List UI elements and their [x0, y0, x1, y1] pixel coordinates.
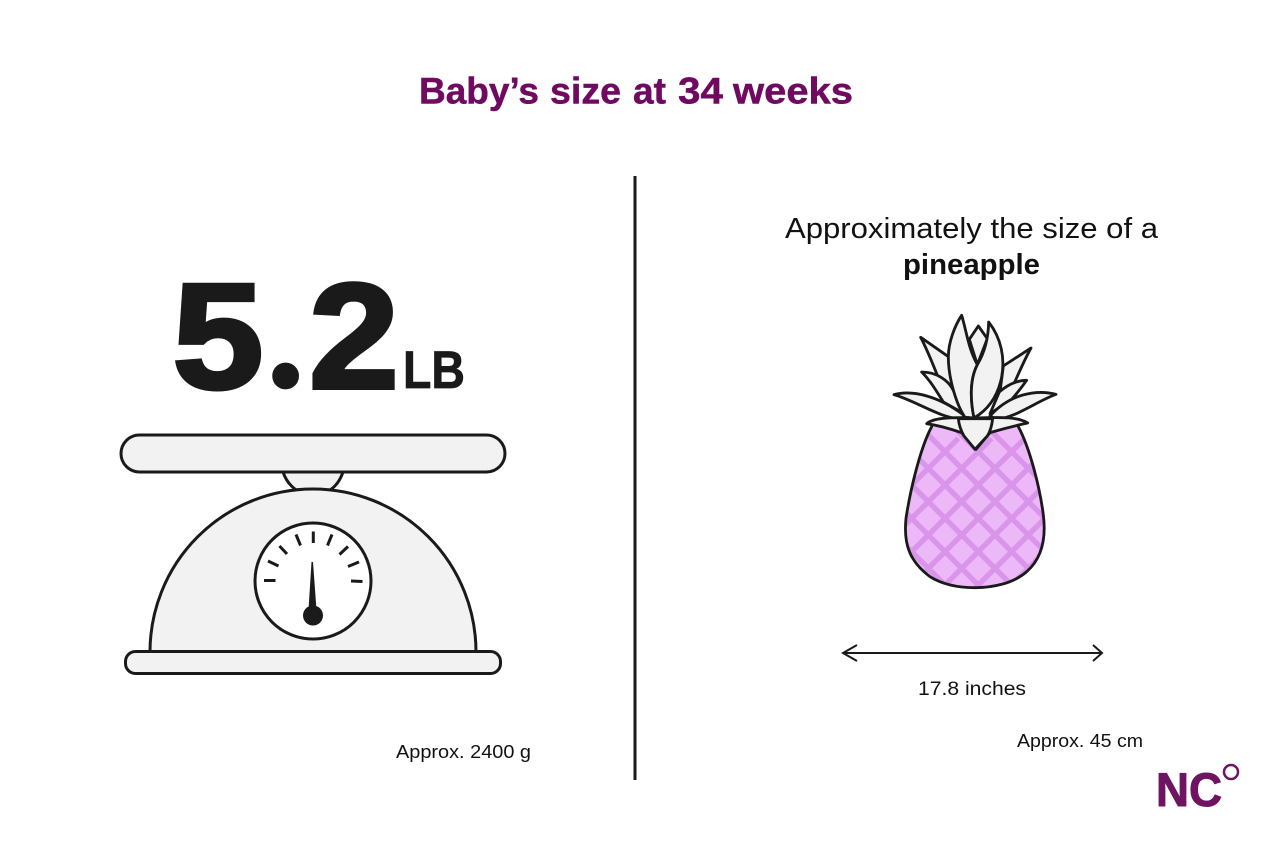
title: at [633, 70, 667, 112]
icon: kitchen scale [121, 435, 505, 674]
weight value: LB [403, 341, 465, 400]
comparison heading: Approximately the size of a [785, 213, 1159, 245]
scale platform [121, 435, 505, 472]
logo ring [1224, 765, 1238, 779]
title: weeks [732, 70, 853, 112]
pineapple leaves [894, 315, 1056, 449]
pineapple body [904, 426, 1046, 590]
metric weight note: Approx. 2400 g [396, 741, 531, 762]
weight value: . [265, 240, 306, 423]
logo letters: NC [1156, 763, 1222, 816]
infographic canvas [120, 76, 1240, 807]
weight value [172, 240, 465, 423]
scale dome [150, 489, 476, 652]
length in inches: 17.8 inches [918, 678, 1026, 700]
divider [634, 176, 636, 780]
title: 34 [678, 70, 723, 112]
panel: weight [121, 240, 531, 762]
scale base [126, 652, 500, 674]
comparison fruit name: pineapple [903, 249, 1040, 281]
width arrow [843, 645, 1102, 661]
icon: pineapple [892, 314, 1058, 590]
logo [1156, 763, 1238, 816]
panel: size comparison [785, 213, 1159, 751]
scale dial [255, 523, 371, 639]
title: size [550, 70, 621, 112]
weight value: 2 [309, 252, 399, 420]
weight value: 5 [172, 252, 264, 420]
title: Baby’s [419, 70, 539, 112]
title [419, 70, 853, 112]
scale stem [283, 472, 343, 491]
metric length note: Approx. 45 cm [1017, 730, 1143, 751]
